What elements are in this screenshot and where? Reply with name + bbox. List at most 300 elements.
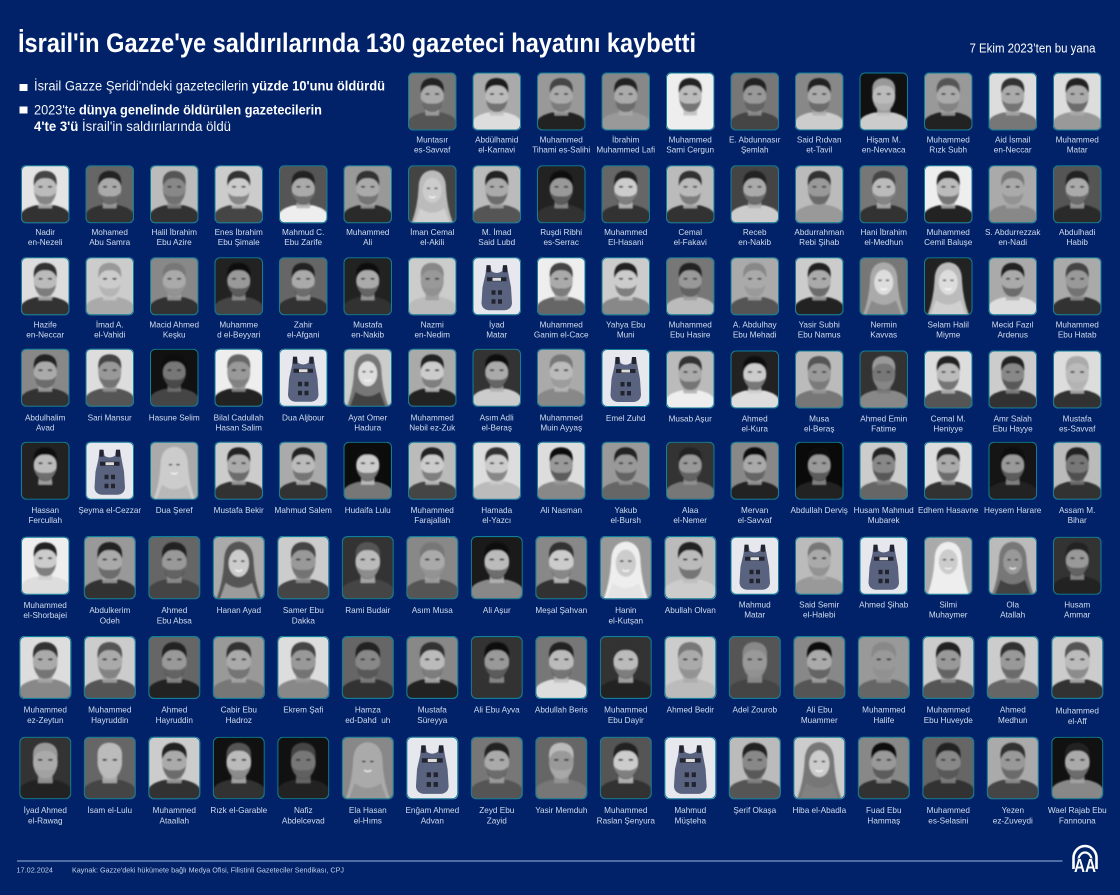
card: Muhammed Ataallah [148,737,200,825]
card: Muhammed Ebu Hasire [666,257,714,340]
name: E. Abdunnasır [729,135,781,144]
row 5 of journalists [21,442,1102,525]
row 1 of journalists [408,72,1102,154]
photo [537,257,586,315]
name: Ardenus [997,331,1028,340]
card: Muhammed el-Aff [1051,636,1103,726]
name: Hamada [481,506,513,515]
card: Rızk el-Garable [210,737,268,815]
name: el-Beraş [804,425,834,434]
photo [472,349,521,407]
card: Abdulkerim Odeh [84,536,136,625]
card: Dua Şeref [150,442,198,515]
card: Abullah Olvan [664,536,716,615]
name: Rızk Subh [929,145,968,154]
name: en-Nevvaca [862,145,906,154]
photo [860,72,908,130]
name: Alaa [682,506,699,515]
photo: press vest [406,737,458,799]
card: Sari Mansur [86,349,134,423]
card: Muhammed Ebu Huveyde [922,636,974,725]
name: Şemlah [741,145,769,154]
card: Mahmud Müşteha [664,737,716,825]
photo [21,537,70,595]
card: Muhammed Cemil Baluşe [924,165,973,247]
card: Hanin el-Kutşan [600,536,652,625]
card: Ekrem Şafi [277,636,329,715]
photo [793,636,845,699]
name: Tihami es-Salihi [532,145,590,154]
photo: press vest [602,349,650,407]
card: Enes İbrahim Ebu Şimale [214,165,263,247]
name: Abdurrahman [794,228,844,237]
name: Habib [1066,238,1088,247]
bullet 2 icon [20,106,28,114]
name: Nafiz [294,806,313,815]
card: Macid Ahmed Keşku [149,257,199,340]
name: Dua Aljbour [282,414,325,423]
card: Hassan Fercullah [21,442,70,525]
name: Ela Hasan [349,806,387,815]
name: Cabir Ebu [221,706,257,715]
name: Hadura [354,424,382,433]
photo [537,349,586,407]
card: Muhammed Hayruddin [84,636,136,725]
name: Ebu Azire [157,238,192,247]
icon: AA logo [1074,846,1096,876]
name: el-Hıms [354,816,382,825]
name: Muhammed [862,706,906,715]
photo [924,165,972,223]
photo [535,737,587,799]
name: Keşku [163,331,186,340]
name: Abdulhadi [1059,228,1096,237]
name: Mohamed [91,228,128,237]
name: Yezen [1002,806,1024,815]
photo [924,72,972,130]
name: Said Rıdvan [797,135,842,144]
photo [21,257,70,315]
photo [730,257,779,315]
photo [84,536,136,599]
card: Samer Ebu Dakka [277,536,329,625]
name: Ali Nasman [540,506,583,515]
name: el-Nemer [673,516,707,525]
photo [924,350,972,408]
photo [666,257,714,315]
name: Ganim el-Cace [534,331,589,340]
card: Nafiz Abdelcevad [277,737,329,825]
name: ez-Zuveydi [993,816,1033,825]
name: Hasan Salim [215,424,262,433]
card: Mustafa Süreyya [406,636,458,725]
photo [860,350,908,408]
row 2 of journalists [21,165,1102,247]
card: Edhem Hasavne [918,442,979,515]
photo [472,165,521,223]
card: Abdullah Beris [535,636,588,715]
photo [277,636,329,699]
photo [1053,537,1102,595]
photo [150,165,198,223]
name: Hassan [31,506,60,515]
name: Ahmed [742,415,768,424]
name: Fannouna [1059,816,1096,825]
name: Hadroz [226,716,252,725]
name: Husam Mahmud [854,506,914,515]
photo [86,349,134,407]
name: Cemal [678,228,702,237]
card: Muhammed Ganim el-Cace [534,257,589,340]
name: Rebi Şihab [799,238,840,247]
name: Ali [363,238,372,247]
name: Muhammed [927,806,970,815]
card: Said Semir el-Halebi [795,537,844,620]
card: Halil İbrahim Ebu Azire [150,165,198,247]
card: Muhammed Ebu Dayir [600,636,652,725]
name: Kavvas [870,331,897,340]
photo [406,636,458,699]
card: Mustafa en-Nakib [344,257,392,340]
photo [342,737,394,799]
card: Musab Aşur [666,350,714,424]
name: el-Halebi [803,611,836,620]
photo [666,350,714,408]
name: Mahmud C. [282,228,324,237]
card: Abdulhalim Avad [21,349,70,433]
name: el-Kutşan [609,616,644,625]
card: Said Rıdvan et-Tavil [795,72,844,154]
photo [602,72,650,130]
name: Muhammed [24,706,67,715]
name: Edhem Hasavne [918,506,979,515]
card: Hasune Selim [149,349,200,423]
card: Hanan Ayad [213,536,265,615]
name: el-Beraş [481,424,512,433]
card: Muhamme d el-Beyyari [214,257,263,340]
card: Ali Aşur [471,536,523,615]
name: Raslan Şenyura [597,816,655,825]
photo [987,636,1039,699]
card: Ali Nasman [537,442,586,515]
photo [922,636,974,699]
name: Emel Zuhd [606,414,646,423]
name: Nazmi [421,321,444,330]
name: Odeh [100,616,120,625]
name: Nadir [35,228,55,237]
name: Samer Ebu [283,606,324,615]
card: Muhammed el-Shorbajei [21,537,70,620]
bullet 1 icon [20,84,28,91]
photo [214,349,263,407]
name: Macid Ahmed [149,321,199,330]
photo [922,737,974,799]
name: Abdulkerim [89,606,130,615]
name: Muhammed [411,506,454,515]
subtitle: date range: 7 Ekim 2023’ten bu yana [970,42,1096,56]
card: Şeyma el-Cezzar [78,442,141,515]
name: el-Karnavi [478,145,515,154]
name: Asım Musa [412,606,453,615]
photo [1053,165,1102,223]
name: Selam Halil [927,321,969,330]
row 8 of journalists [19,737,1107,825]
card: Husam Ammar [1053,537,1102,620]
photo [86,165,134,223]
photo: press vest [664,737,716,799]
photo [279,442,328,500]
name: en-Nezeli [28,238,63,247]
photo [279,257,328,315]
photo [1053,350,1102,408]
name: Avad [36,424,55,433]
photo [795,537,844,595]
card: Assam M. Bihar [1053,442,1102,525]
photo [342,536,394,599]
card: M. İmad Said Lubd [472,165,521,247]
photo [795,257,844,315]
photo [150,349,198,407]
name: Ola [1006,601,1020,610]
name: Nebil ez-Zuk [409,424,456,433]
name: Receb [743,228,767,237]
card: Cabir Ebu Hadroz [213,636,265,725]
photo [406,536,458,599]
card: Yahya Ebu Muni [602,257,650,340]
photo [988,350,1037,408]
card: Bilal Cadullah Hasan Salim [214,349,264,433]
photo [19,636,71,699]
card: Muhammed Muin Ayyaş [537,349,586,433]
card: Abdurrahman Rebi Şihab [794,165,844,247]
name: Matar [744,611,765,620]
name: es-Savvaf [1059,425,1096,434]
photo [666,442,714,500]
name: Hazife [34,321,57,330]
name: El-Hasani [608,238,644,247]
card: İyad Ahmed el-Rawag [19,737,71,825]
card: Hişam M. en-Nevvaca [860,72,908,154]
card: Ahmed Medhun [987,636,1039,725]
name: A. Abdulhay [733,321,777,330]
card: Ahmed Emin Fatime [860,350,908,434]
photo [795,350,844,408]
card: Dua Aljbour [279,349,328,423]
name: Muhammed [927,228,970,237]
card: Muhammed Nebil ez-Zuk [408,349,456,433]
card: Asım Musa [406,536,458,615]
photo [84,636,136,699]
row 4 of journalists [21,349,1102,434]
photo [602,165,650,223]
photo [858,636,910,699]
photo [408,257,456,315]
card: Receb en-Nakib [730,165,779,247]
photo [472,72,521,130]
footer [16,861,1062,874]
photo [472,442,521,500]
name: S. Abdurrezzak [985,228,1041,237]
photo [344,257,392,315]
card: Nermin Kavvas [860,257,908,340]
name: Mustafa Bekir [214,506,264,515]
photo [858,737,910,799]
source: Kaynak: Gazze'deki hükümete bağlı Medya Ofisi, Filistinli Gazeteciler Sendikası, CPJ [72,866,344,874]
photo [730,442,779,500]
date: 17.02.2024 [16,866,53,874]
name: Halil İbrahim [151,227,197,237]
row 3 of journalists [21,257,1102,340]
photo [537,72,586,130]
name: es-Savvaf [414,145,451,154]
name: Ebu Hasire [670,331,711,340]
name: Rami Budair [345,606,391,615]
photo [150,442,198,500]
name: Ebu Şimale [218,238,260,247]
name: Abdullah Beris [535,706,588,715]
name: es-Selasini [928,816,969,825]
name: Zahir [294,321,313,330]
card: Ahmed Hayruddin [148,636,200,725]
photo [148,737,200,799]
name: Muhamme [219,321,258,330]
card: Ela Hasan el-Hıms [342,737,394,825]
name: Heysem Harare [984,506,1042,515]
name: Muhammed [927,135,970,144]
card: Hamza ed-Dahd uh [342,636,394,725]
card: Ali Ebu Ayva [471,636,523,715]
name: Abdülhamid [475,135,519,144]
photo [279,165,328,223]
photo [148,536,200,599]
photo [729,737,781,799]
name: Mubarek [868,516,901,525]
card: Yasir Subhi Ebu Namus [795,257,844,340]
photo [471,536,523,599]
name: Meşal Şahvan [535,606,588,615]
name: el-Yazcı [482,516,511,525]
card: Cemal el-Fakavi [666,165,714,247]
name: Hanan Ayad [217,606,261,615]
card: Mahmud C. Ebu Zarife [279,165,328,247]
photo [600,536,652,599]
name: Ayat Omer [348,414,387,423]
name: Mustafa [1063,415,1092,424]
name: el-Bursh [610,516,641,525]
name: Hayruddin [91,716,129,725]
name: Muhammed [540,321,583,330]
card: Hiba el-Abadla [792,737,847,815]
card: Hudaifa Lulu [344,442,392,515]
name: Hiba el-Abadla [792,806,847,815]
name: Muhammed Lafi [596,145,655,154]
name: Enes İbrahim [215,227,263,237]
photo [795,442,844,500]
photo [213,536,265,599]
photo [729,636,781,699]
card: Muhammed Ebu Hatab [1053,257,1102,340]
photo [214,442,263,500]
photo [795,165,844,223]
name: Abdelcevad [282,816,325,825]
photo [600,737,652,799]
name: Dakka [292,616,315,625]
card: Cemal M. Heniyye [924,350,972,434]
name: Ruşdi Ribhi [540,228,582,237]
card: Fuad Ebu Hammaş [858,737,910,825]
name: Dua Şeref [156,506,193,515]
name: el-Fakavi [674,238,707,247]
photo [471,737,523,799]
name: Said Semir [799,601,839,610]
photo [988,537,1037,595]
name: Ebu Namus [798,331,841,340]
name: Hişam M. [866,135,901,144]
name: Ali Ebu [806,706,833,715]
name: İsam el-Lulu [87,805,133,815]
name: Muni [617,331,635,340]
name: Ebu Hayye [993,425,1033,434]
name: Sari Mansur [88,414,132,423]
name: Mahmud [674,806,707,815]
name: Halife [873,716,895,725]
name: Hammaş [867,816,900,825]
name: en-Nedim [414,331,450,340]
photo [924,257,972,315]
card: Muntasır es-Savvaf [408,72,456,154]
photo [344,165,392,223]
card: Muhammed Sami Cergun [666,72,715,154]
name: Muhammed [669,135,712,144]
name: Ahmed [161,606,188,615]
name: Wael Rajab Ebu [1048,806,1107,815]
name: Abullah Olvan [665,606,716,615]
card: Ola Atallah [988,537,1037,620]
name: Silmi [939,601,957,610]
card: Silmi Muhaymer [924,537,972,620]
name: Muhammed [604,228,648,237]
name: en-Nadi [998,238,1027,247]
name: Mustafa [418,706,447,715]
name: Muhammed [1056,135,1099,144]
name: Zeyd Ebu [479,806,515,815]
name: el-Rawag [28,816,63,825]
photo [277,737,329,799]
bullet 2 text: 2023'te dünya genelinde öldürülen gazetecilerin [34,102,322,118]
name: el-Vahidi [94,331,126,340]
card: Mustafa es-Savvaf [1053,350,1102,434]
card: Muhammed Ali [344,165,392,247]
card: Wael Rajab Ebu Fannouna [1048,737,1107,825]
photo [408,442,456,500]
card: Muhammed Rızk Subh [924,72,972,154]
photo [84,737,136,799]
card: Muhammed ez-Zeytun [19,636,71,725]
photo [408,165,456,223]
photo [793,737,845,799]
card: Rami Budair [342,536,394,615]
name: Ahmed [1000,706,1026,715]
card: Asım Adli el-Beraş [472,349,521,433]
photo [602,257,650,315]
card: S. Abdurrezzak en-Nadi [985,165,1041,247]
name: İmad A. [96,320,124,330]
photo [535,536,587,599]
photo: press vest [860,537,908,595]
photo [860,165,908,223]
name: Muntasır [416,135,448,144]
card: Zeyd Ebu Zayid [471,737,523,825]
